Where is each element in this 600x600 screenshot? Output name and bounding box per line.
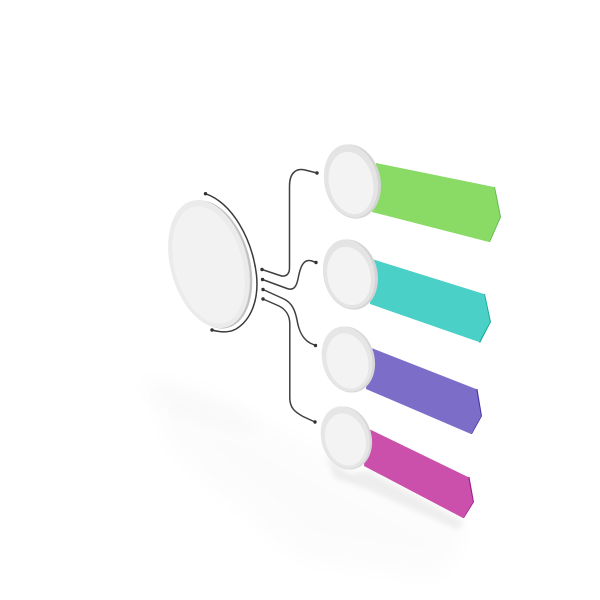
green tab face: [372, 163, 500, 242]
connector lines: [260, 170, 319, 424]
floor shadows: [135, 371, 470, 580]
connector to purple: [261, 288, 317, 347]
rim: [317, 139, 388, 224]
teal tab face: [370, 259, 490, 342]
connector to green: [260, 170, 319, 276]
connector to teal: [261, 260, 318, 289]
bevel: [317, 139, 385, 223]
magenta tab edge: [463, 477, 474, 518]
main disc: [155, 191, 266, 338]
purple tab face: [366, 347, 481, 434]
rim: [315, 320, 382, 399]
teal disc: [316, 234, 385, 315]
magenta disc: [314, 400, 379, 476]
main disc edge: [156, 191, 266, 338]
teal tab edge: [479, 294, 491, 343]
connector to magenta: [261, 297, 317, 424]
rim: [316, 234, 385, 315]
face: [323, 148, 379, 218]
face: [319, 409, 372, 470]
green tab: [372, 163, 501, 242]
purple disc: [315, 320, 382, 399]
magenta tab: [364, 428, 474, 518]
purple tab edge: [471, 389, 482, 434]
arc end dots: [204, 192, 214, 332]
rim: [314, 400, 379, 476]
face: [320, 329, 375, 393]
teal tab: [370, 259, 491, 343]
magenta tab face: [364, 428, 473, 518]
bevel: [314, 400, 377, 475]
main disc rim: [155, 191, 263, 337]
main disc face: [160, 198, 257, 332]
green disc: [317, 139, 388, 224]
purple tab: [366, 347, 482, 434]
face: [321, 242, 377, 310]
bevel: [316, 234, 382, 314]
arc around main disc: [206, 194, 257, 332]
green tab edge: [489, 187, 501, 242]
bevel: [315, 321, 379, 397]
